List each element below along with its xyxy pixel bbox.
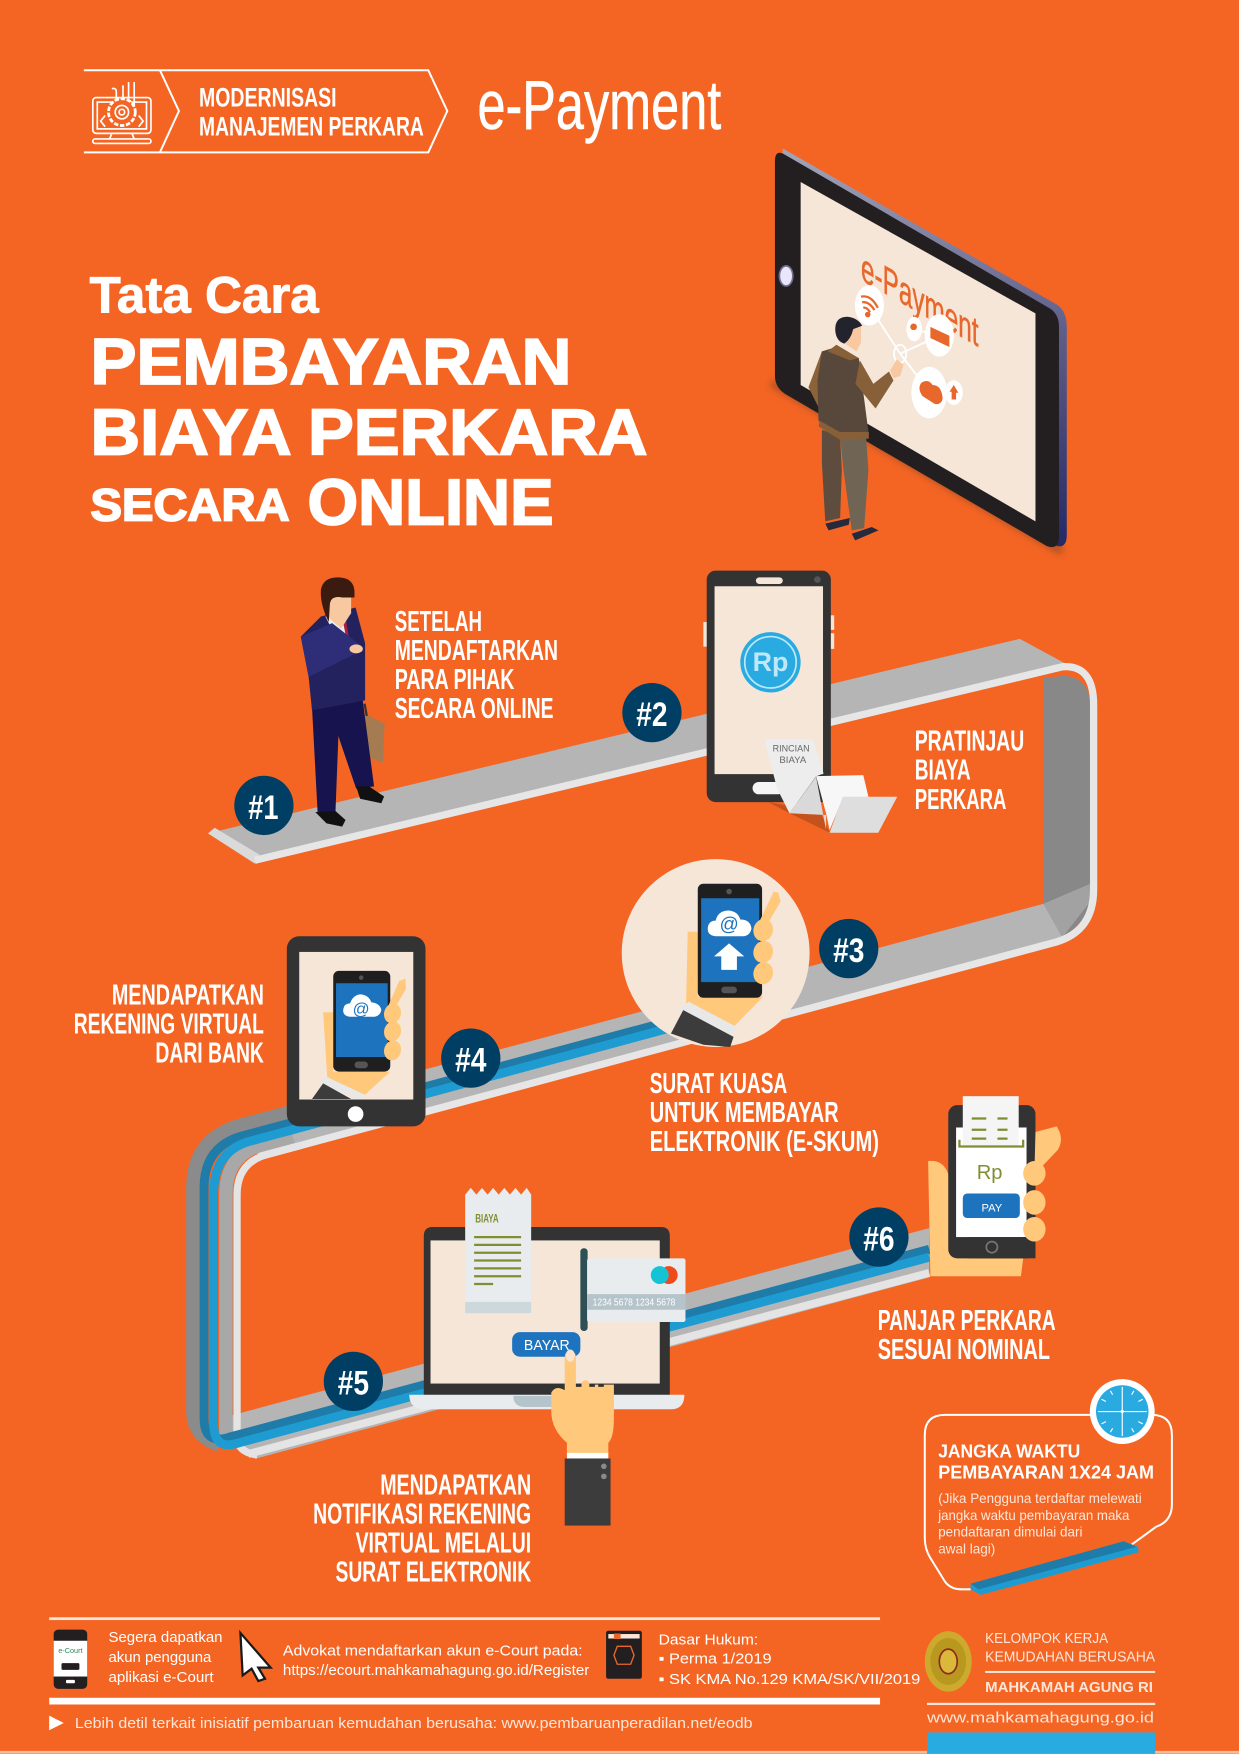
footer rules: [49, 1617, 880, 1704]
footer: law book icon: [606, 1631, 642, 1679]
footer: legal basis: Dasar Hukum:: [659, 1632, 758, 1649]
briefcase: [338, 704, 385, 763]
pay button: [512, 1332, 580, 1357]
text: step 5: VIRTUAL MELALUI: [356, 1527, 531, 1559]
lower ribbon segment: [229, 1228, 929, 1458]
step badges: [234, 683, 909, 1411]
callout body: [937, 1490, 1142, 1557]
callout: payment time limit: [925, 1379, 1172, 1595]
footer: legal basis: ▪ Perma 1/2019: [659, 1651, 772, 1668]
badge #4: #4: [455, 1042, 487, 1080]
pointing hand: [551, 1349, 614, 1526]
text: step 3: SURAT KUASA: [650, 1068, 787, 1100]
badge #6: [849, 1207, 909, 1267]
callout heading: [938, 1440, 1154, 1483]
header title: e-Payment: e-Payment: [477, 66, 721, 144]
text: step 6: [878, 1305, 1056, 1366]
badge #3: #3: [833, 932, 864, 970]
header label: MODERNISASI: [199, 83, 337, 113]
top ribbon segment: [208, 639, 1094, 1157]
text: step 5: NOTIFIKASI REKENING: [313, 1498, 531, 1530]
text: step 6: PANJAR PERKARA: [878, 1305, 1056, 1337]
text: step 2: PERKARA: [915, 784, 1006, 816]
footer: register text: Advokat mendaftarkan akun e-Court pada:: [283, 1642, 583, 1659]
bill receipt: BIAYA: [475, 1212, 499, 1226]
footer: more info: Lebih detil terkait inisiatif pembaruan kemudahan berusaha: www.pembaruanperadilan.net/eodb: [75, 1715, 753, 1732]
payment card: 1234 5678 1234 5678: [593, 1297, 676, 1308]
text: step 3: ELEKTRONIK (E-SKUM): [650, 1126, 879, 1158]
receipt paper: RINCIAN: [773, 744, 810, 754]
text: step 1: MENDAFTARKAN: [395, 635, 558, 667]
payment card: [580, 1248, 685, 1331]
network icons: [855, 285, 963, 418]
badge #6: #6: [863, 1220, 895, 1258]
callout body: pendaftaran dimulai dari: [938, 1524, 1082, 1540]
text: step 4: [74, 979, 264, 1070]
footer: app text: [108, 1629, 223, 1686]
text: step 6: SESUAI NOMINAL: [878, 1334, 1050, 1366]
header label: [199, 83, 424, 142]
step 6: phone pay with hand: [928, 1096, 1061, 1276]
text: step 1: SETELAH: [395, 606, 482, 638]
left vertical bend: [193, 1017, 929, 1455]
badge #5: [324, 1352, 383, 1411]
main title: Tata Cara: [89, 265, 319, 323]
tablet camera: [779, 266, 793, 286]
receipt paper: BIAYA: [779, 755, 806, 765]
callout heading: JANGKA WAKTU: [938, 1440, 1080, 1461]
main title: [89, 265, 647, 539]
organisation block: KELOMPOK KERJA: [985, 1630, 1109, 1647]
badge #5: #5: [338, 1365, 369, 1403]
text: step 4: MENDAPATKAN: [112, 979, 264, 1011]
footer: register text: https://ecourt.mahkamahagung.go.id/Register: [283, 1662, 589, 1679]
callout body: awal lagi): [938, 1541, 995, 1557]
organisation block: MAHKAMAH AGUNG RI: [985, 1679, 1153, 1696]
step 4: tablet with phone: [287, 936, 425, 1126]
text: step 5: MENDAPATKAN: [380, 1469, 531, 1501]
header label: MANAJEMEN PERKARA: [199, 112, 424, 142]
text: step 1: PARA PIHAK: [395, 664, 515, 696]
footer: app icon: [54, 1630, 87, 1689]
text: step 5: [313, 1469, 531, 1588]
icon: monitor with gear: [93, 82, 151, 143]
step 6: phone pay with hand: Rp: [977, 1162, 1002, 1184]
organisation block: KEMUDAHAN BERUSAHA: [985, 1648, 1156, 1665]
footer: app icon: e-Court: [58, 1646, 83, 1655]
organisation block: www.mahkamahagung.go.id: [926, 1709, 1154, 1726]
badge #1: [234, 776, 294, 835]
step 5: laptop with receipt and card: [409, 1188, 685, 1526]
badge #3: [819, 919, 878, 978]
main title: BIAYA PERKARA: [91, 395, 647, 468]
footer: app text: akun pengguna: [108, 1649, 212, 1666]
text: step 4: DARI BANK: [155, 1038, 264, 1070]
callout body: (Jika Pengguna terdaftar melewati: [938, 1490, 1142, 1506]
text: step 2: [915, 726, 1024, 816]
text: step 1: [395, 606, 558, 725]
text: step 4: REKENING VIRTUAL: [74, 1009, 264, 1041]
main title: PEMBAYARAN: [91, 325, 571, 398]
organisation block: [926, 1630, 1156, 1754]
step 3: circle with phone upload: @: [719, 915, 739, 936]
step 2: phone with Rp and receipt: [703, 571, 897, 833]
step 1: businessman: [301, 577, 385, 827]
illustration: giant tablet with man: [772, 148, 1067, 552]
receipt paper: [764, 739, 897, 833]
icon: clock: [1090, 1379, 1155, 1444]
badge #2: #2: [636, 696, 668, 734]
text: step 2: BIAYA: [915, 755, 971, 787]
footer: register text: [283, 1642, 589, 1679]
text: step 3: UNTUK MEMBAYAR: [650, 1097, 839, 1129]
footer: legal basis: [659, 1632, 920, 1688]
pay button: BAYAR: [524, 1338, 570, 1354]
main title: SECARA: [91, 479, 290, 530]
process ribbon: [193, 639, 1094, 1458]
footer: legal basis: ▪ SK KMA No.129 KMA/SK/VII/2019: [659, 1671, 920, 1688]
text: step 2: PRATINJAU: [915, 726, 1024, 758]
callout body: jangka waktu pembayaran maka: [937, 1507, 1130, 1523]
step 3: circle with phone upload: [622, 859, 810, 1047]
cloud and arrow: [708, 911, 751, 936]
footer: cursor icon: [240, 1633, 271, 1681]
seal: Mahkamah Agung: [925, 1631, 972, 1692]
text: step 5: SURAT ELEKTRONIK: [335, 1556, 531, 1588]
bill receipt: [465, 1188, 531, 1313]
callout bar: [971, 1541, 1138, 1595]
Rp coin: [740, 632, 801, 692]
badge #2: [622, 683, 682, 742]
badge #4: [441, 1029, 500, 1088]
main title: ONLINE: [308, 466, 554, 539]
text: step 3: [650, 1068, 879, 1158]
footer: app text: Segera dapatkan: [108, 1629, 223, 1646]
Rp coin: Rp: [753, 647, 788, 677]
step 6: phone pay with hand: PAY: [982, 1202, 1003, 1214]
text: step 1: SECARA ONLINE: [395, 693, 554, 725]
step 4: tablet with phone: @: [353, 1000, 370, 1019]
callout heading: PEMBAYARAN 1X24 JAM: [938, 1462, 1154, 1483]
header banner: [84, 70, 447, 152]
man standing: [808, 317, 904, 540]
footer: app text: aplikasi e-Court: [108, 1669, 214, 1686]
screen title: e-Payment: [861, 245, 978, 356]
badge #1: #1: [248, 789, 278, 827]
